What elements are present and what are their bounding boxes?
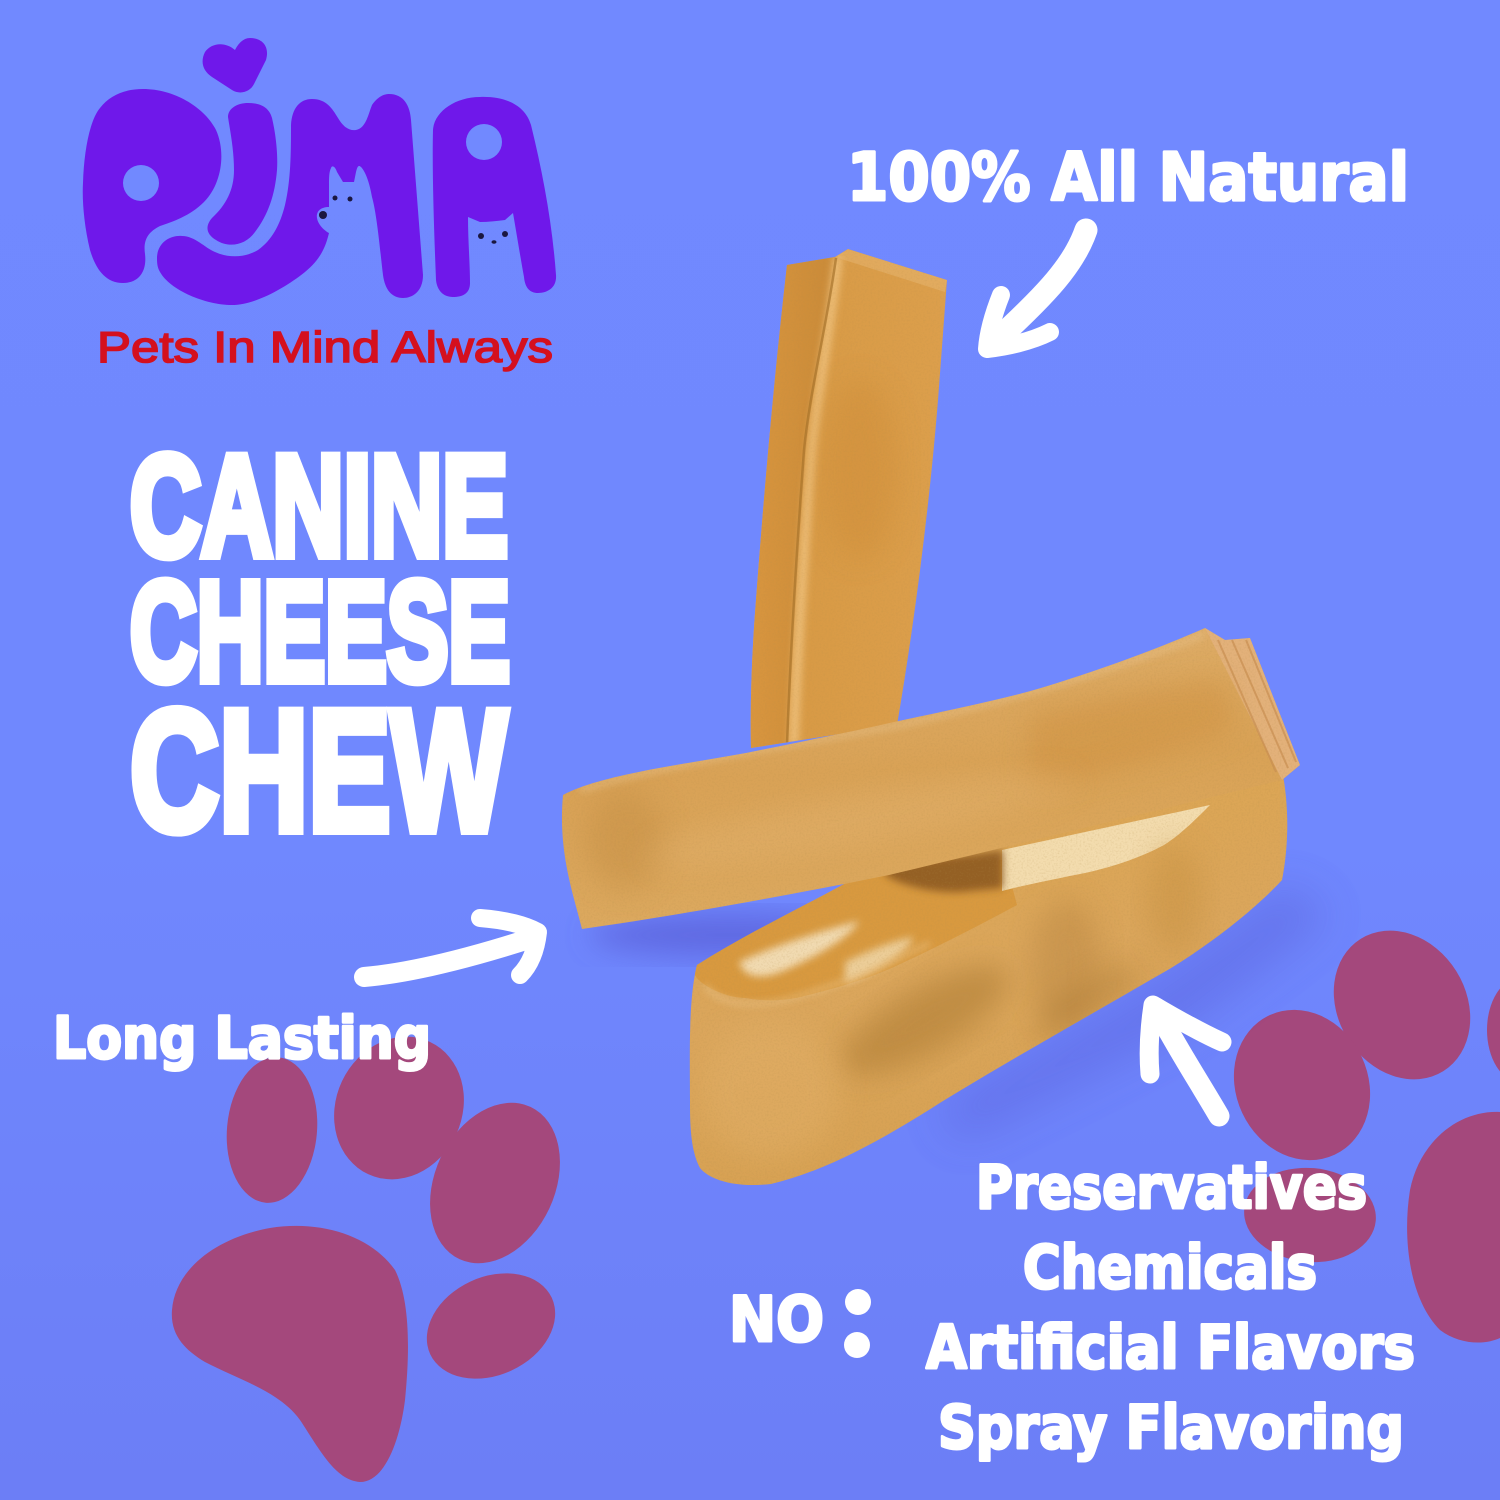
logo: PIMA <box>83 38 556 305</box>
lower chew cut edge highlight <box>1002 805 1210 891</box>
paw print: bottom left <box>172 1015 585 1482</box>
list items: Preservatives <box>976 1153 1367 1223</box>
paw print: right edge <box>1210 905 1500 1343</box>
top chew ridged end <box>1205 628 1300 780</box>
logo letters J and M with dog cutout <box>157 94 423 305</box>
title: Canine Cheese Chew: CHEW <box>130 675 507 867</box>
list items <box>926 1153 1415 1463</box>
NO label: NO <box>729 1283 824 1356</box>
logo letter I <box>207 103 277 245</box>
label: 100% All Natural: 100% All Natural <box>847 139 1409 216</box>
arrow: to upright chew <box>987 230 1086 349</box>
arrow: to top chew <box>364 918 538 977</box>
lower chew glossy highlights <box>739 921 859 976</box>
tagline: Pets In Mind Always <box>97 323 553 372</box>
list items: Spray Flavoring <box>938 1393 1404 1463</box>
chew: lower <box>680 770 1300 1200</box>
chew: top horizontal <box>555 620 1305 940</box>
chew shadows <box>590 885 1330 1140</box>
top chew shaded band <box>1032 681 1228 778</box>
list items: Artificial Flavors <box>926 1313 1415 1383</box>
title: Canine Cheese Chew: CHEESE <box>130 552 510 710</box>
claims: NO list <box>729 1153 1415 1463</box>
list items: Chemicals <box>1023 1233 1317 1303</box>
lower chew dark patches <box>840 960 1010 1080</box>
logo letter P <box>83 89 221 283</box>
label: Long Lasting: Long Lasting <box>53 1004 431 1072</box>
lower chew top face <box>695 860 1017 1000</box>
logo pet faces <box>319 196 508 244</box>
chew: upright <box>750 249 947 748</box>
colon <box>844 1289 871 1358</box>
title: Canine Cheese Chew <box>130 427 510 867</box>
arrow: to lower chew <box>1149 1005 1222 1116</box>
title: Canine Cheese Chew: CANINE <box>130 427 508 586</box>
logo letter A with cat cutout <box>433 97 556 297</box>
logo heart <box>203 38 267 92</box>
